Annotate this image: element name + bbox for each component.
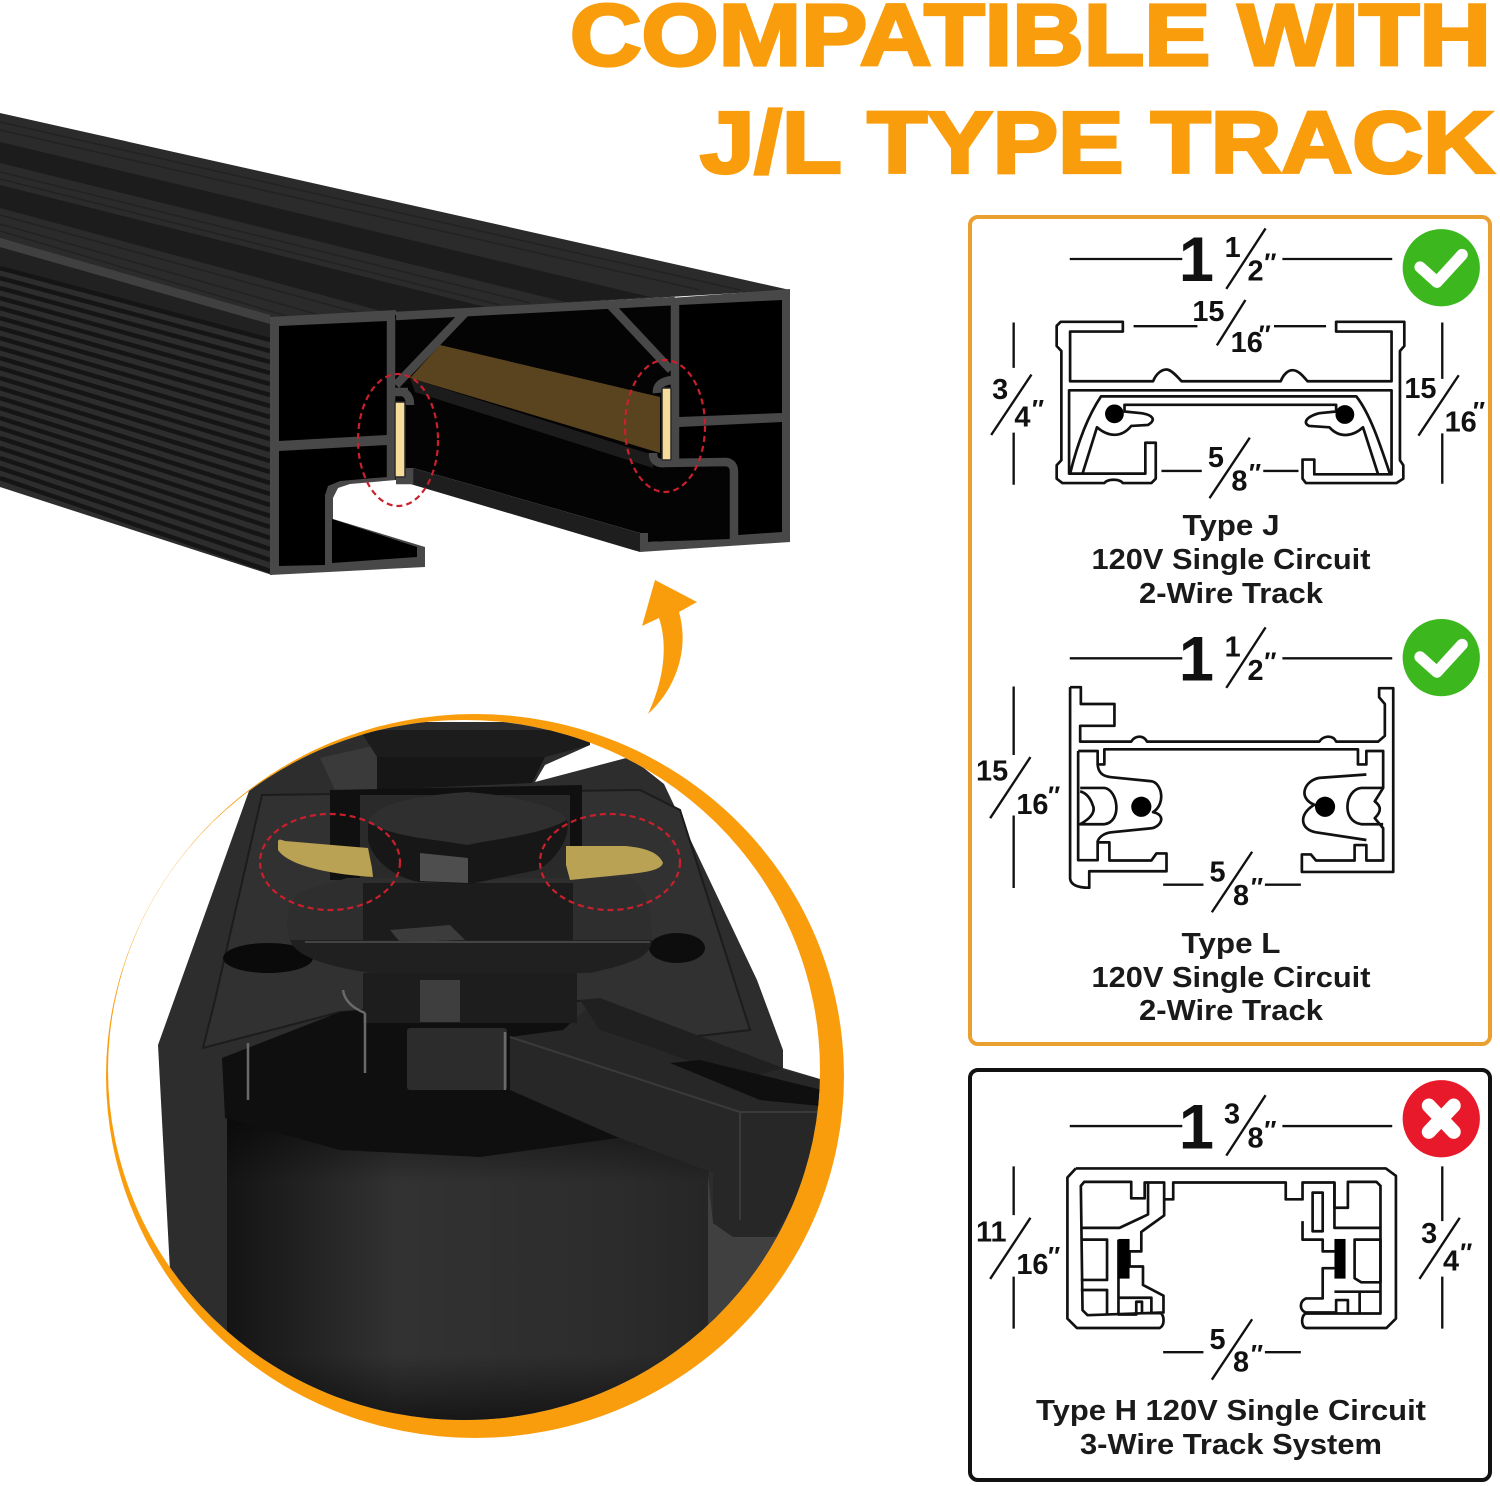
bottom opening dimension: 5 bbox=[1209, 1324, 1226, 1356]
caption: Type J: 2-Wire Track bbox=[1139, 578, 1324, 610]
post bbox=[363, 973, 577, 1023]
width dimension: 3 bbox=[1224, 1099, 1240, 1131]
left height dimension: 4 bbox=[1014, 402, 1030, 434]
title bbox=[570, 0, 1494, 192]
red highlight ellipses bbox=[358, 360, 705, 506]
width dimension: 2 bbox=[1247, 256, 1264, 288]
caption: Type L: 120V Single Circuit bbox=[1092, 962, 1371, 994]
bottom opening dimension: 8 bbox=[1233, 880, 1249, 912]
right height dimension bbox=[1419, 1166, 1473, 1329]
diagram: Type L bbox=[976, 619, 1480, 912]
hex nut bbox=[407, 1028, 507, 1090]
recessed plate bbox=[203, 790, 750, 1048]
icon: green check bbox=[1403, 619, 1480, 696]
top opening dimension: ″ bbox=[1257, 321, 1271, 349]
width dimension bbox=[1070, 624, 1392, 694]
panel: incompatible track bbox=[970, 1070, 1490, 1480]
left height dimension: 11 bbox=[976, 1216, 1007, 1248]
track front frame underlay bbox=[270, 289, 790, 575]
pin lines bbox=[248, 990, 505, 1100]
flange bbox=[287, 877, 652, 973]
caption: Type L bbox=[1092, 928, 1371, 1027]
Type J profile bbox=[1057, 322, 1404, 483]
width dimension bbox=[1070, 1092, 1392, 1162]
connector photo bbox=[158, 722, 850, 1447]
height dimension: 16 bbox=[1016, 789, 1048, 821]
width dimension: 1 bbox=[1225, 631, 1241, 663]
left height dimension: 16 bbox=[1016, 1249, 1048, 1281]
left height dimension: 3 bbox=[992, 374, 1008, 406]
Type L profile bbox=[1070, 687, 1393, 888]
track side face bbox=[0, 238, 272, 575]
track front frame bbox=[391, 301, 734, 541]
left height dimension bbox=[976, 1166, 1061, 1329]
circular detail view bbox=[106, 714, 850, 1447]
width dimension: 1 bbox=[1179, 624, 1214, 694]
red highlight ellipses bbox=[260, 814, 680, 910]
width dimension: 1 bbox=[1225, 232, 1241, 264]
track section illustration bbox=[0, 113, 790, 575]
holes bbox=[223, 943, 313, 973]
cylinder bbox=[227, 1117, 709, 1447]
left height dimension: ″ bbox=[1030, 396, 1044, 424]
icon: red cross bbox=[1403, 1080, 1480, 1157]
bottom opening dimension: 5 bbox=[1208, 442, 1224, 474]
housing body bbox=[158, 722, 850, 1440]
right height dimension bbox=[1404, 322, 1485, 484]
right height dimension: ″ bbox=[1471, 398, 1485, 426]
white inner circle bbox=[108, 720, 820, 1420]
right height dimension: ″ bbox=[1459, 1239, 1473, 1267]
panel: compatible tracks bbox=[970, 217, 1490, 1044]
width dimension: 1 bbox=[1179, 225, 1214, 295]
upper rail bbox=[320, 730, 590, 880]
round head bbox=[368, 792, 568, 884]
right height dimension: 3 bbox=[1421, 1218, 1437, 1250]
diagram: Type H bbox=[976, 1080, 1480, 1380]
gold contacts bbox=[395, 388, 671, 477]
width dimension bbox=[1070, 225, 1392, 295]
caption: Type L: 2-Wire Track bbox=[1139, 995, 1324, 1027]
orange crescent bbox=[106, 714, 844, 1438]
track interior bbox=[395, 305, 730, 552]
height dimension: ″ bbox=[1047, 783, 1061, 811]
right height dimension: 4 bbox=[1443, 1246, 1459, 1278]
bottom opening dimension bbox=[1161, 438, 1299, 498]
bottom opening dimension: 8 bbox=[1233, 1347, 1249, 1379]
top opening dimension bbox=[1134, 296, 1326, 359]
bottom opening dimension: 8 bbox=[1231, 465, 1247, 497]
caption: Type J bbox=[1092, 510, 1371, 610]
Type H profile bbox=[1067, 1168, 1396, 1328]
bottom opening dimension: 5 bbox=[1209, 856, 1226, 888]
width dimension: 8 bbox=[1247, 1123, 1264, 1155]
icon: curved arrow bbox=[642, 580, 697, 714]
caption: Type H: 3-Wire Track System bbox=[1080, 1429, 1382, 1461]
track front cavities bbox=[279, 300, 782, 566]
caption: Type J: 120V Single Circuit bbox=[1092, 544, 1371, 576]
bottom opening dimension bbox=[1163, 1319, 1301, 1380]
caption: Type J: Type J bbox=[1182, 510, 1280, 542]
left height dimension: ″ bbox=[1047, 1243, 1061, 1271]
width dimension: 1 bbox=[1179, 1092, 1214, 1162]
top opening dimension: 16 bbox=[1231, 327, 1263, 359]
arm bbox=[510, 998, 830, 1237]
caption: Type L: Type L bbox=[1182, 928, 1280, 960]
track top surface bbox=[0, 113, 790, 320]
height dimension bbox=[976, 687, 1061, 888]
caption: Type H bbox=[1036, 1395, 1426, 1461]
bottom opening dimension bbox=[1163, 852, 1301, 912]
width dimension: ″ bbox=[1263, 1117, 1277, 1145]
diagram: Type J bbox=[991, 225, 1485, 498]
icon: green check bbox=[1403, 229, 1480, 306]
bottom opening dimension: ″ bbox=[1247, 460, 1261, 488]
width dimension: 2 bbox=[1247, 655, 1264, 687]
top opening dimension: 15 bbox=[1192, 296, 1224, 328]
width dimension: ″ bbox=[1263, 249, 1277, 277]
left height dimension bbox=[991, 322, 1044, 485]
caption: Type H: Type H 120V Single Circuit bbox=[1036, 1395, 1426, 1427]
right body side bbox=[708, 1176, 777, 1325]
bottom opening dimension: ″ bbox=[1249, 1341, 1263, 1369]
right height dimension: 16 bbox=[1445, 407, 1477, 439]
title: J/L TYPE TRACK bbox=[700, 94, 1494, 192]
width dimension: ″ bbox=[1263, 648, 1277, 676]
right height dimension: 15 bbox=[1404, 373, 1436, 405]
bottom opening dimension: ″ bbox=[1249, 874, 1263, 902]
height dimension: 15 bbox=[976, 756, 1008, 788]
gold blades bbox=[278, 840, 663, 880]
dark dish bbox=[222, 1005, 625, 1157]
post highlight bbox=[420, 980, 460, 1022]
